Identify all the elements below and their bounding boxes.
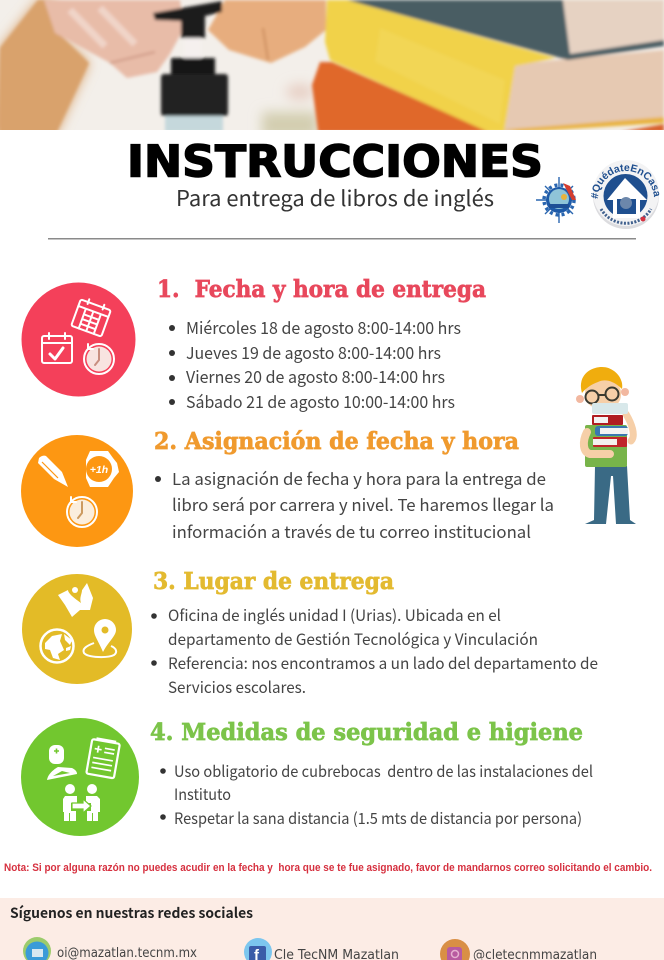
icon: clock — [67, 497, 97, 527]
icon: doctor — [47, 745, 77, 780]
list: delivery dates: Jueves 19 de agosto 8:00-14:00 hrs — [186, 340, 441, 364]
illustration: boy carrying books — [576, 367, 636, 524]
subtitle: Para entrega de libros de inglés — [176, 182, 494, 213]
icon: tilted calendar — [71, 297, 112, 337]
icon circle: safety, green — [21, 718, 139, 836]
header photo: soap dispenser and books — [0, 0, 664, 138]
text: assignment details — [155, 466, 554, 543]
heading 3: 3. Lugar de entrega — [153, 568, 394, 595]
text: delivery location: Oficina de inglés unidad I (Urias). Ubicada en el — [168, 604, 501, 626]
text: safety measures: Uso obligatorio de cubrebocas dentro de las instalaciones del — [174, 760, 593, 782]
icon: clock — [84, 344, 114, 374]
text: safety measures: Instituto — [174, 783, 231, 805]
text: safety measures: Respetar la sana distancia (1.5 mts de distancia por persona) — [174, 807, 582, 829]
logo: QuédateEnCasa seal — [591, 160, 660, 229]
heading 4: 4. Medidas de seguridad e higiene — [150, 719, 583, 746]
icon: map pin on ring — [83, 619, 116, 657]
title: INSTRUCCIONES — [127, 136, 543, 188]
text: delivery location: Referencia: nos encontramos a un lado del departamento de — [168, 652, 598, 674]
heading 2: 2. Asignación de fecha y hora — [154, 428, 519, 455]
list: delivery dates: Viernes 20 de agosto 8:00-14:00 hrs — [186, 364, 445, 388]
text: delivery location: Servicios escolares. — [168, 676, 306, 698]
text: delivery location — [151, 604, 598, 698]
icon: two people exchanging — [63, 784, 100, 821]
icon: email — [23, 937, 51, 960]
logo: institute gear emblem — [536, 177, 576, 223]
icon: pen — [38, 456, 68, 487]
icon: medical clipboard — [86, 738, 120, 778]
icon: globe — [40, 630, 74, 662]
text: delivery location: departamento de Gestión Tecnológica y Vinculación — [168, 628, 538, 650]
text: safety measures — [160, 760, 593, 829]
footer panel: social media — [0, 898, 664, 960]
icon: folded map — [58, 583, 93, 617]
icon circle: assignment, orange — [21, 435, 133, 547]
icon circle: location, yellow — [22, 574, 132, 684]
text: assignment details: información a través de tu correo institucional — [172, 519, 531, 543]
logo: QuédateEnCasa seal: #QuédateEnCasa — [591, 164, 660, 199]
text: assignment details: La asignación de fecha y hora para la entrega de — [172, 466, 546, 490]
icon: calendar with check — [42, 333, 72, 363]
heading 1: 1. Fecha y hora de entrega — [157, 276, 486, 303]
icon circle: dates, red — [22, 282, 136, 396]
list: delivery dates: Miércoles 18 de agosto 8:00-14:00 hrs — [186, 315, 461, 339]
icon: instagram — [440, 939, 470, 960]
icon: facebook — [244, 938, 272, 960]
icon: watch +1h: +1h — [90, 464, 108, 476]
text: assignment details: libro será por carrera y nivel. Te haremos llegar la — [172, 492, 554, 516]
footer heading: Síguenos en nuestras redes sociales — [10, 903, 253, 923]
list: delivery dates — [169, 315, 461, 413]
list: delivery dates: Sábado 21 de agosto 10:00-14:00 hrs — [186, 389, 455, 413]
